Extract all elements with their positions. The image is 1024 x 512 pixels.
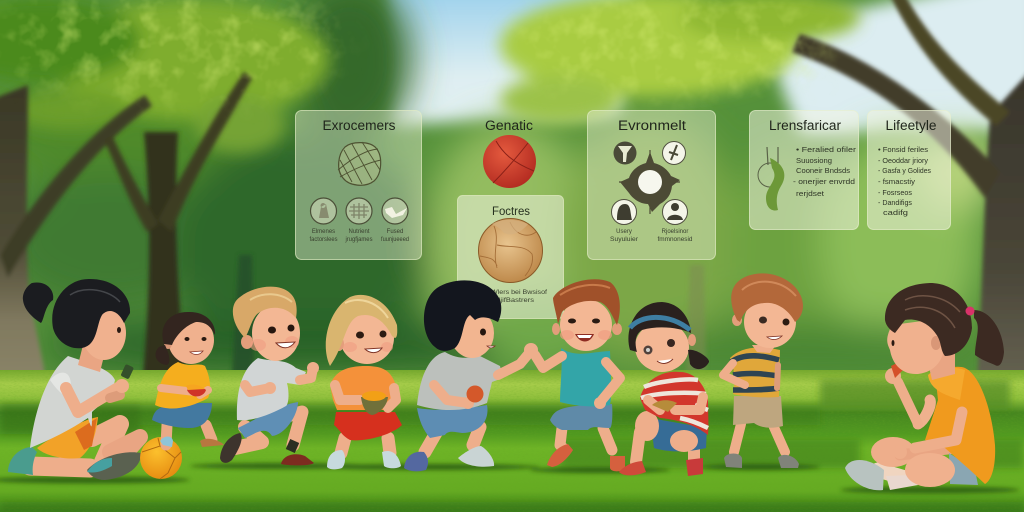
icon: green twisted leaf [758,147,784,210]
icon: child circle [310,198,336,224]
heading: Evronmelt: Evronmelt [618,118,686,133]
child 5: black hair, reaching arm [404,280,530,471]
list: Lifeetyle text: - fsmacstiy [878,177,915,186]
icon: tan cracked ball [478,218,542,282]
list: Lifeetyle text: - Gasfa y Golides [878,166,931,175]
panel: Evronmelt: Suyuluier [610,237,638,243]
yellow ball [140,437,182,479]
panel: Foctres [458,196,564,318]
heading: Exrocemers: Exrocemers [322,118,396,133]
child 1: sitting, black ponytail [8,279,182,480]
list: Lrensfaricar text: - onerjier envrdd [793,177,855,186]
icon: red ball [483,135,536,188]
background: park with trees and sky [0,0,1024,405]
panel: Genatic [483,118,536,188]
icon: top right circle [662,142,686,164]
icon: bottom left circle [612,200,636,224]
list: Lifeetyle text: - Fosrseos [878,188,912,197]
child 4: blond girl, orange shirt [326,295,402,469]
list: Lrensfaricar text: rerjdset [796,189,825,198]
panel: Lrensfaricar [750,110,858,230]
panel: Exrocemers: fuunjueeed [381,237,409,243]
caption: middle: Nutrient [348,229,370,235]
child 6: teal shirt, auburn hair [524,279,625,471]
heading: Lifeetyle: Lifeetyle [886,118,936,133]
icon: central gear [619,150,680,214]
caption: left: Elmenes [312,229,335,235]
child 9: sitting, orange shirt, brown ponytail [845,283,1004,490]
panel: Lifeetyle [868,110,950,230]
list: Lrensfaricar text: Cooneir Bndsds [796,166,850,175]
list: Lifeetyle text [878,145,931,217]
list: Lifeetyle text: - Oeoddar jriory [878,156,928,165]
icon: pattern circle [346,198,372,224]
panel: Evronmelt [588,110,716,260]
list: Lifeetyle text: - Dandifigs [878,198,912,207]
heading: Lrensfaricar: Lrensfaricar [769,118,842,133]
list: Lifeetyle text: cadifg [883,208,908,217]
child 3: blond boy, grey shirt [220,287,319,465]
panel: Evronmelt: fmmnonesid [658,237,692,243]
list: Lrensfaricar text [793,145,857,198]
caption: Foctres: Wlers bei Bwsisof [491,290,547,296]
heading: Genatic: Genatic [485,118,533,133]
icon: hand circle [382,198,408,224]
child 7: red striped shirt, blue headband [619,302,709,476]
child 8: striped shirt, khaki shorts [723,273,803,468]
heading: Foctres: Foctres [492,206,530,218]
list: Lrensfaricar text: • Feralied ofiler [796,145,857,154]
caption: right: Rjoelsinor [662,229,688,235]
caption: right: Fused [387,229,403,235]
list: Lifeetyle text: • Fonsid feriles [878,145,928,154]
caption: left: Usery [616,229,632,235]
panel: Exrocemers: jrugfjames [345,237,372,243]
list: Lrensfaricar text: Suuosiong [796,156,832,165]
icon: top left circle [614,142,636,164]
grass lawn [0,370,1024,512]
panel: Foctres: edjifBastrers [492,298,534,304]
panel: Exrocemers [296,110,422,260]
icon: textured sphere [338,142,381,185]
child 2: yellow shirt, dark hair [152,312,224,447]
icon: bottom right circle [662,200,688,224]
panel: Exrocemers: factorslees [310,237,338,243]
